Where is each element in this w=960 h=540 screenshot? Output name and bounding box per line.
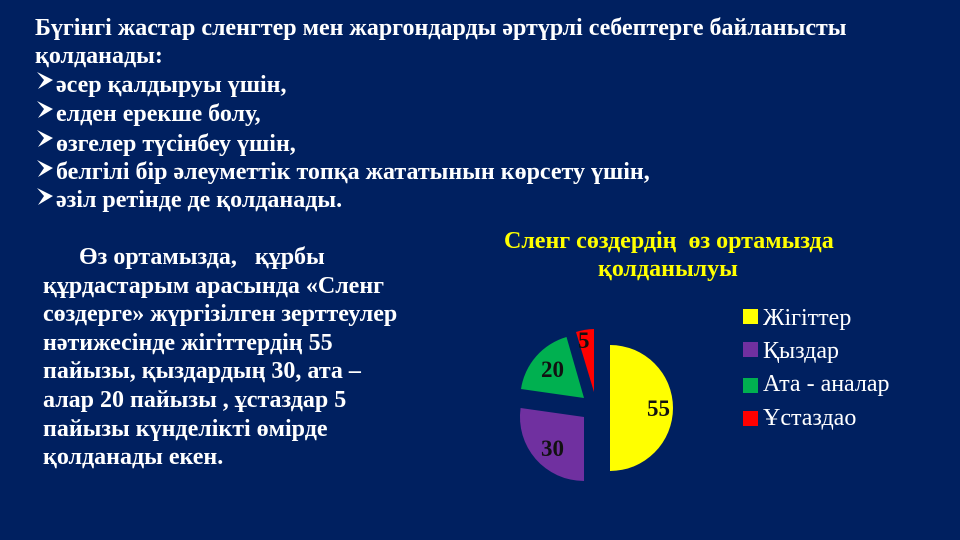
chart legend — [743, 305, 890, 431]
bullet list of reasons: белгілі бір әлеуметтік топқа жататынын көрсету үшін, — [56, 159, 650, 185]
bullet list of reasons: елден ерекше болу, — [56, 101, 261, 127]
survey paragraph: қолданады екен. — [43, 444, 223, 470]
chart title — [504, 228, 834, 282]
survey paragraph: алар 20 пайызы , ұстаздар 5 — [43, 387, 346, 413]
chart title: қолданылуы — [598, 256, 738, 282]
slice: 30 purple: 30 — [541, 436, 564, 461]
slice: 5 red — [576, 328, 594, 392]
bullet list of reasons: әсер қалдыруы үшін, — [56, 72, 287, 98]
intro heading — [35, 15, 847, 69]
slice: 55 yellow — [610, 345, 673, 471]
slice: 20 green — [521, 337, 584, 398]
survey paragraph — [43, 244, 397, 470]
slice: 20 green: 20 — [541, 357, 564, 382]
slice: 30 purple — [520, 408, 584, 481]
bullet list of reasons: әзіл ретінде де қолданады. — [56, 187, 342, 213]
survey paragraph: Өз ортамызда, құрбы — [79, 244, 325, 270]
survey paragraph: құрдастарым арасында «Сленг — [43, 273, 384, 299]
legend: Жігіттер: Жігіттер — [763, 305, 851, 331]
survey paragraph: нәтижесінде жігіттердің 55 — [43, 330, 333, 356]
survey paragraph: сөздерге» жүргізілген зерттеулер — [43, 301, 397, 327]
slice: 5 red: 5 — [578, 328, 590, 353]
bullet list of reasons: өзгелер түсінбеу үшін, — [56, 131, 296, 157]
survey paragraph: пайызы күнделікті өмірде — [43, 416, 327, 442]
legend: Ата - аналар: Ата - аналар — [763, 371, 890, 397]
chart title: Сленг сөздердің өз ортамызда — [504, 228, 834, 254]
survey paragraph: пайызы, қыздардың 30, ата – — [43, 358, 361, 384]
legend: Ұстаздао: Ұстаздао — [763, 405, 856, 431]
legend: Қыздар: Қыздар — [763, 338, 839, 364]
bullet list of reasons — [37, 72, 650, 213]
slice: 55 yellow: 55 — [647, 396, 670, 421]
intro heading: қолданады: — [35, 43, 163, 69]
intro heading: Бүгінгі жастар сленгтер мен жаргондарды әртүрлі себептерге байланысты — [35, 15, 847, 41]
